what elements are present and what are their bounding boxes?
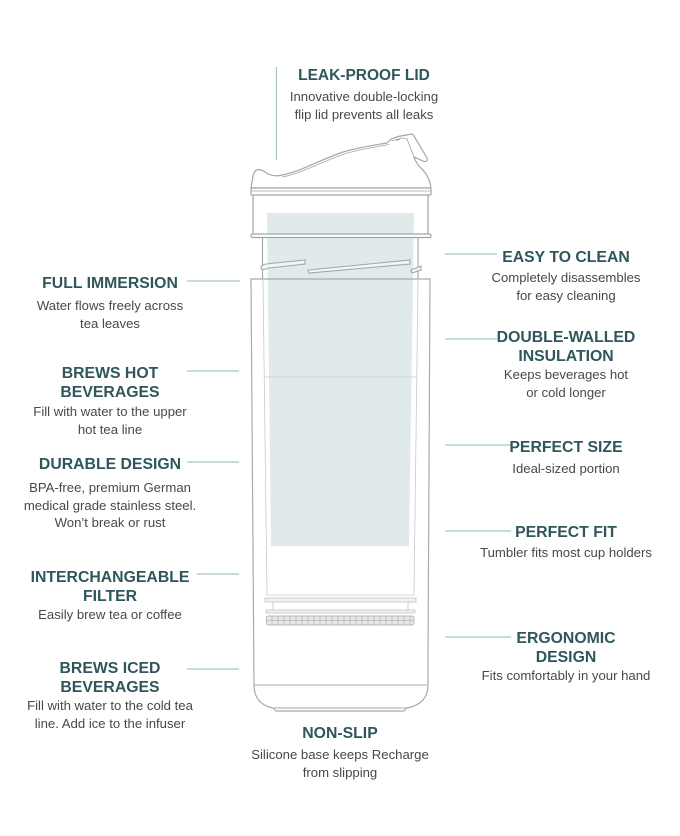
callout: non-slip: Silicone base keeps Recharge <box>251 747 429 762</box>
callout: brews iced beverages: BREWS ICED <box>60 660 160 677</box>
callout: interchangeable filter: Easily brew tea or coffee <box>38 607 182 622</box>
callout: double-walled insulation: DOUBLE-WALLED <box>497 329 635 346</box>
callout: perfect size: Ideal-sized portion <box>512 461 620 476</box>
callout: interchangeable filter: FILTER <box>83 588 137 605</box>
lid <box>251 134 431 238</box>
callout: leak-proof lid: Innovative double-locking <box>290 89 438 104</box>
tumbler body <box>251 279 430 711</box>
callout: brews iced beverages <box>27 660 193 731</box>
callout: ergonomic design: DESIGN <box>536 649 596 666</box>
callout: ergonomic design: ERGONOMIC <box>516 630 616 647</box>
callout: perfect fit: PERFECT FIT <box>515 524 617 541</box>
callout: brews hot beverages: BREWS HOT <box>62 365 158 382</box>
filter rings <box>265 598 416 613</box>
callout: interchangeable filter <box>31 569 189 622</box>
callout: full immersion <box>37 275 183 331</box>
knurled filter ring <box>266 616 414 625</box>
callout: leak-proof lid: flip lid prevents all leaks <box>295 106 433 122</box>
callout: double-walled insulation: INSULATION <box>518 348 614 365</box>
callout: perfect fit: Tumbler fits most cup holders <box>480 545 652 560</box>
callout: leak-proof lid: LEAK-PROOF LID <box>298 67 430 84</box>
leader lines <box>187 67 511 669</box>
callout: double-walled insulation <box>497 329 635 400</box>
callout: ergonomic design <box>482 630 650 683</box>
callout: double-walled insulation: or cold longer <box>526 385 606 400</box>
neck and threads <box>261 237 421 279</box>
callout: easy to clean: EASY TO CLEAN <box>502 249 630 266</box>
inner wall and hot tea line <box>263 279 418 595</box>
callout: non-slip <box>251 725 429 780</box>
callout: perfect fit <box>480 524 652 560</box>
callout: interchangeable filter: INTERCHANGEABLE <box>31 569 189 586</box>
tea infuser tint <box>267 213 414 546</box>
callout: full immersion: Water flows freely across <box>37 298 183 313</box>
callout: easy to clean: for easy cleaning <box>516 288 616 302</box>
callout: non-slip: from slipping <box>303 764 377 780</box>
callout: durable design: medical grade stainless steel. <box>24 498 196 512</box>
callout: durable design: BPA-free, premium German <box>29 480 191 495</box>
callout: non-slip: NON-SLIP <box>302 725 378 742</box>
callout: double-walled insulation: Keeps beverages hot <box>504 367 628 382</box>
callout: brews hot beverages: BEVERAGES <box>60 384 160 401</box>
callout: durable design: DURABLE DESIGN <box>39 456 181 473</box>
callout: leak-proof lid <box>290 67 438 122</box>
callout: full immersion: tea leaves <box>80 316 140 331</box>
callout: brews hot beverages: Fill with water to the upper <box>33 404 187 419</box>
callout: ergonomic design: Fits comfortably in your hand <box>482 668 650 683</box>
callout: brews hot beverages: hot tea line <box>78 422 142 437</box>
callout: brews iced beverages: Fill with water to the cold tea <box>27 698 193 713</box>
callout: brews iced beverages: BEVERAGES <box>60 679 160 696</box>
callout: easy to clean: Completely disassembles <box>492 270 640 285</box>
callout: perfect size: PERFECT SIZE <box>509 439 623 456</box>
callout: full immersion: FULL IMMERSION <box>42 275 178 292</box>
callout: brews iced beverages: line. Add ice to the infuser <box>35 716 185 731</box>
callout: perfect size <box>509 439 623 476</box>
callout: easy to clean <box>492 249 640 302</box>
callout: brews hot beverages <box>33 365 187 437</box>
callout: durable design: Won’t break or rust <box>55 515 165 530</box>
callout: durable design <box>24 456 196 530</box>
